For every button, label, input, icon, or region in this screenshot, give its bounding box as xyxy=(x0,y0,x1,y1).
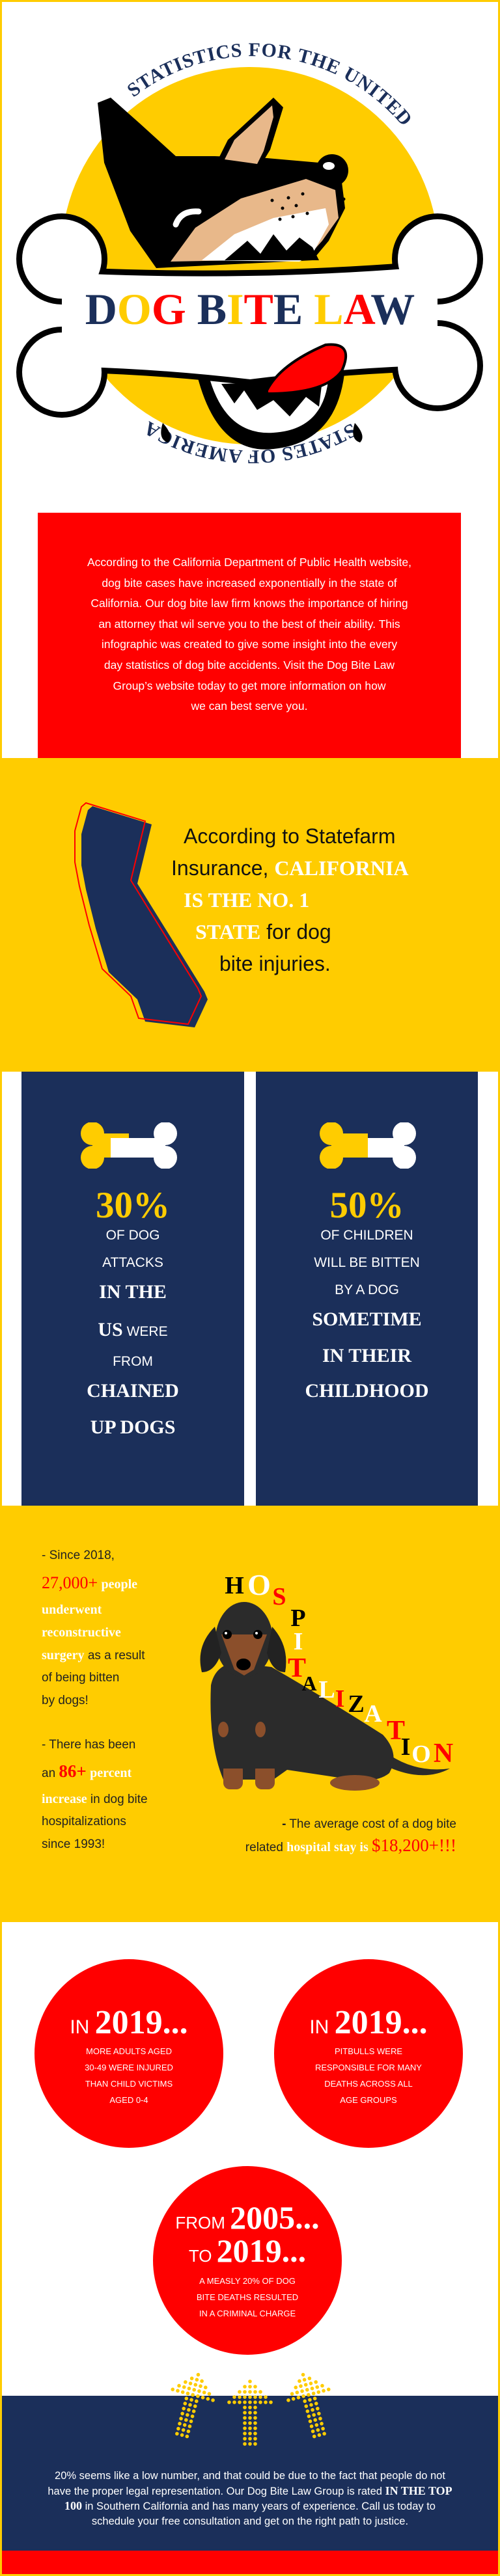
panel: 30% stat: OF DOG xyxy=(106,1228,160,1243)
text: statefarm claim xyxy=(171,824,409,975)
text: surgery stats: hospitalizations xyxy=(42,1815,126,1828)
circle: 2005 to 2019: IN A CRIMINAL CHARGE xyxy=(199,2309,296,2318)
panel: 50% stat: SOMETIME xyxy=(312,1308,422,1330)
circle: 2019 pitbulls: IN 2019... xyxy=(309,2004,428,2041)
circle: 2005 to 2019: TO 2019... xyxy=(189,2232,306,2269)
circle: 2019 pitbulls: AGE GROUPS xyxy=(340,2095,397,2105)
text: hospital cost xyxy=(245,1817,456,1855)
intro red box: infographic was created to give some insight into the every xyxy=(102,638,397,651)
illustration: dachshund with HOSPITALIZATION: P xyxy=(290,1605,306,1632)
illustration: dachshund with HOSPITALIZATION: A xyxy=(364,1700,382,1728)
text: hospital cost: related hospital stay is $18,200+!!! xyxy=(245,1836,456,1855)
text: surgery stats: increase in dog bite xyxy=(42,1792,148,1806)
text: statefarm claim: bite injuries. xyxy=(219,952,331,975)
footer: 20% seems like a low number, and that could be due to the fact that people do not xyxy=(55,2470,445,2482)
intro red box: California. Our dog bite law firm knows the importance of hiring xyxy=(90,597,408,610)
circle: 2019 adults: AGED 0-4 xyxy=(109,2095,148,2105)
panel: 30% stat xyxy=(21,1072,244,1506)
circle: 2019 adults xyxy=(35,1959,223,2148)
circle: 2005 to 2019: A MEASLY 20% OF DOG xyxy=(199,2276,296,2286)
illustration: dachshund with HOSPITALIZATION: N xyxy=(434,1739,453,1769)
text: statefarm claim: IS THE NO. 1 xyxy=(184,888,309,912)
text: surgery stats: 27,000+ people xyxy=(42,1573,137,1592)
intro red box: According to the California Department of Public Health website, xyxy=(87,556,411,569)
intro red box: dog bite cases have increased exponentially in the state of xyxy=(102,576,397,590)
circle: 2019 adults: 30-49 WERE INJURED xyxy=(85,2063,173,2072)
panel: 30% stat: IN THE xyxy=(99,1281,167,1303)
panel: 50% stat: WILL BE BITTEN xyxy=(314,1255,420,1270)
icon: bone xyxy=(81,1122,177,1169)
text: surgery stats: of being bitten xyxy=(42,1671,119,1685)
bone xyxy=(16,213,483,418)
text: surgery stats: an 86+ percent xyxy=(42,1761,132,1781)
title DOG BITE LAW: DOG BITE LAW xyxy=(85,284,415,334)
circle: 2019 pitbulls: PITBULLS WERE xyxy=(335,2046,402,2056)
icon: california map xyxy=(74,802,208,1027)
dog head xyxy=(98,98,348,268)
intro red box: Group’s website today to get more information on how xyxy=(113,679,385,692)
illustration: dachshund with HOSPITALIZATION: L xyxy=(318,1676,335,1703)
illustration: dachshund with HOSPITALIZATION: S xyxy=(272,1583,286,1610)
text: surgery stats: - Since 2018, xyxy=(42,1549,115,1562)
bottom red strip xyxy=(0,2551,500,2576)
yellow sun circle xyxy=(61,67,439,444)
illustration: dachshund with HOSPITALIZATION: I xyxy=(294,1628,303,1655)
intro red box: we can best serve you. xyxy=(191,699,307,712)
arc text bottom: STATES OF AMERICA xyxy=(147,421,354,463)
lower jaw xyxy=(161,368,363,450)
icon: bone xyxy=(320,1122,416,1169)
text: surgery stats: by dogs! xyxy=(42,1694,89,1707)
panel: 30% stat: UP DOGS xyxy=(90,1417,175,1438)
illustration: dachshund with HOSPITALIZATION: O xyxy=(411,1741,431,1768)
circle: 2005 to 2019: BITE DEATHS RESULTED xyxy=(197,2292,298,2302)
illustration: dachshund with HOSPITALIZATION: A xyxy=(301,1672,317,1695)
panel: 30% stat: 30% xyxy=(96,1185,170,1226)
circle: 2019 pitbulls xyxy=(274,1959,463,2148)
illustration: dachshund with HOSPITALIZATION: T xyxy=(387,1716,405,1746)
footer xyxy=(0,2396,500,2551)
text: surgery stats: - There has been xyxy=(42,1738,135,1752)
text: surgery stats: reconstructive xyxy=(42,1625,121,1640)
text: statefarm claim: STATE for dog xyxy=(195,920,331,943)
panel: 30% stat: CHAINED xyxy=(87,1380,179,1402)
circle: 2019 adults: THAN CHILD VICTIMS xyxy=(85,2079,173,2089)
circle: 2019 pitbulls: RESPONSIBLE FOR MANY xyxy=(315,2063,422,2072)
circle: 2019 adults: MORE ADULTS AGED xyxy=(86,2046,172,2056)
intro red box xyxy=(38,513,461,758)
panel: 50% stat: CHILDHOOD xyxy=(305,1380,429,1402)
illustration: dachshund with HOSPITALIZATION: H xyxy=(225,1572,244,1599)
illustration: dachshund with HOSPITALIZATION: I xyxy=(335,1685,344,1713)
panel: 30% stat: FROM xyxy=(113,1354,153,1369)
header logo xyxy=(16,43,483,463)
circle: 2005 to 2019 xyxy=(153,2166,342,2355)
panel: 30% stat: US WERE xyxy=(98,1319,168,1340)
text: surgery stats: surgery as a result xyxy=(42,1648,145,1662)
footer: schedule your free consultation and get on the right path to justice. xyxy=(92,2515,408,2527)
text: statefarm claim: Insurance, CALIFORNIA xyxy=(171,856,409,880)
panel: 50% stat: BY A DOG xyxy=(335,1282,399,1297)
illustration: dachshund with HOSPITALIZATION: Z xyxy=(348,1690,365,1718)
panel: california xyxy=(0,758,500,1072)
circle: 2019 adults: IN 2019... xyxy=(70,2004,188,2041)
arc text top: STATISTICS FOR THE UNITED xyxy=(128,43,410,124)
panel: 50% stat: 50% xyxy=(329,1185,404,1226)
circle: 2019 pitbulls: DEATHS ACROSS ALL xyxy=(324,2079,413,2089)
panel: 50% stat: OF CHILDREN xyxy=(320,1228,413,1243)
illustration: dachshund with HOSPITALIZATION: O xyxy=(247,1568,271,1601)
text: surgery stats: since 1993! xyxy=(42,1837,105,1851)
panel: hospitalization xyxy=(0,1506,500,1922)
illustration: dachshund with HOSPITALIZATION: T xyxy=(288,1653,306,1683)
text: statefarm claim: According to Statefarm xyxy=(184,824,395,848)
panel: 50% stat xyxy=(256,1072,478,1506)
illustration: dachshund with HOSPITALIZATION xyxy=(201,1568,453,1791)
intro red box: an attorney that wil serve you to the best of their ability. This xyxy=(98,617,400,630)
text: surgery stats xyxy=(42,1549,148,1851)
icon: dotted arrows xyxy=(171,2372,331,2446)
footer: 100 in Southern California and has many years of experience. Call us today to xyxy=(64,2499,436,2512)
panel: 50% stat: IN THEIR xyxy=(322,1345,411,1366)
text: surgery stats: underwent xyxy=(42,1603,102,1617)
panel: 30% stat: ATTACKS xyxy=(102,1255,163,1270)
footer: have the proper legal representation. Our Dog Bite Law Group is rated IN THE TOP xyxy=(48,2484,452,2497)
circle: 2005 to 2019: FROM 2005... xyxy=(175,2199,320,2236)
intro red box: day statistics of dog bite accidents. Visit the Dog Bite Law xyxy=(104,658,395,671)
illustration: dachshund with HOSPITALIZATION: I xyxy=(401,1733,410,1761)
text: hospital cost: - The average cost of a dog bite xyxy=(282,1817,456,1831)
